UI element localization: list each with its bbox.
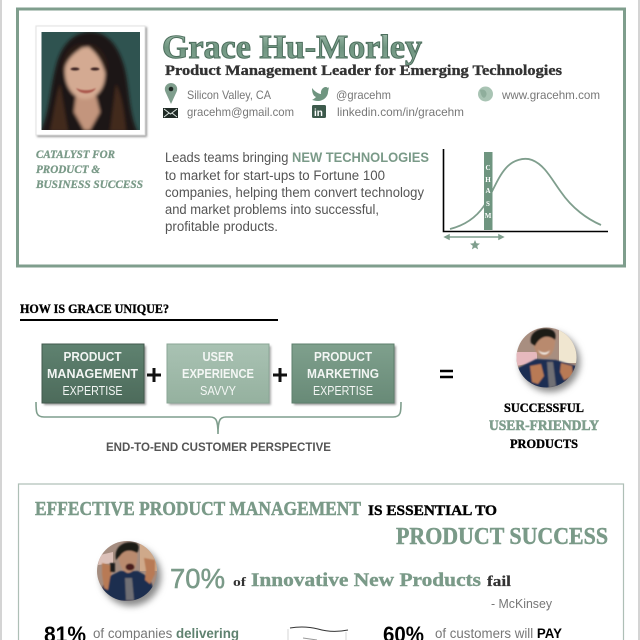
box: product marketing: MARKETING <box>307 367 379 381</box>
twitter handle: @gracehm <box>336 88 391 102</box>
box: product management: MANAGEMENT <box>47 367 138 381</box>
title: name: Grace Hu-Morley <box>162 29 422 66</box>
chasm bar <box>484 152 492 230</box>
chart: chasm adoption curve: H <box>485 176 491 184</box>
tagline: CATALYST FOR <box>36 149 115 161</box>
chart: chasm adoption curve: S <box>486 200 490 208</box>
box: user experience: SAVVY <box>200 384 237 398</box>
intro paragraph <box>165 150 429 234</box>
icon: star <box>470 240 480 249</box>
tagline <box>35 149 143 191</box>
heading: effective product management: EFFECTIVE PRODUCT MANAGEMENT <box>35 498 362 520</box>
box: product marketing: PRODUCT <box>314 350 372 364</box>
icon: sketch graphic <box>288 627 348 640</box>
plus <box>147 368 161 382</box>
stat: 70 percent <box>170 563 511 594</box>
stat: 70 percent: Innovative New Products <box>251 570 481 591</box>
stat: 70 percent: 70% <box>170 563 225 594</box>
icon: linkedin <box>312 105 326 119</box>
plus <box>273 368 287 382</box>
intro paragraph: companies, helping them convert technology <box>165 185 424 200</box>
stat: 81 percent <box>44 622 239 640</box>
box: user experience: USER <box>202 350 234 364</box>
bracket <box>36 402 401 434</box>
icon: linkedin: in <box>314 108 323 119</box>
portrait photo <box>36 26 147 137</box>
location text: Silicon Valley, CA <box>187 88 271 102</box>
website text: www.gracehm.com <box>501 88 600 102</box>
panel: product management stats <box>18 484 624 640</box>
stat: 70 percent: fail <box>487 574 511 590</box>
chart: chasm adoption curve <box>444 149 608 249</box>
heading: effective product management: IS ESSENTIAL TO <box>368 503 497 519</box>
tagline: PRODUCT & <box>36 164 100 176</box>
box: product management: PRODUCT <box>64 350 122 364</box>
box: product marketing <box>292 344 396 405</box>
heading: how is grace unique: HOW IS GRACE UNIQUE? <box>20 302 169 316</box>
icon: location pin <box>165 83 177 104</box>
photo: happy man <box>516 327 580 392</box>
result text <box>489 401 599 451</box>
caption: end-to-end: END-TO-END CUSTOMER PERSPECTIVE <box>106 440 331 454</box>
linkedin text: linkedin.com/in/gracehm <box>337 105 464 119</box>
icon: globe <box>478 86 493 102</box>
tagline: BUSINESS SUCCESS <box>35 179 143 191</box>
panel: profile header <box>18 9 624 266</box>
box: product management <box>42 344 146 405</box>
source: McKinsey: - McKinsey <box>491 597 553 611</box>
stat: 70 percent: of <box>233 574 247 589</box>
intro paragraph: to market for start-ups to Fortune 100 <box>165 168 385 183</box>
result text: USER-FRIENDLY <box>489 418 599 434</box>
email text: gracehm@gmail.com <box>187 105 294 119</box>
intro paragraph: profitable products. <box>165 219 278 234</box>
equals sign <box>440 371 453 377</box>
result text: PRODUCTS <box>510 437 578 451</box>
chart: chasm adoption curve: A <box>485 187 491 195</box>
heading: effective product management: PRODUCT SUCCESS <box>396 524 608 550</box>
chart: chasm adoption curve: M <box>485 212 492 220</box>
box: user experience: EXPERIENCE <box>182 367 254 381</box>
photo: frustrated man <box>97 541 161 606</box>
result text: SUCCESSFUL <box>504 401 584 415</box>
chart: chasm adoption curve: C <box>485 164 491 172</box>
icon: twitter <box>312 87 329 101</box>
intro paragraph: and market problems into successful, <box>165 202 379 217</box>
box: user experience <box>167 344 271 405</box>
heading: effective product management <box>35 498 608 550</box>
box: product management: EXPERTISE <box>62 384 122 398</box>
arrow <box>445 235 503 239</box>
stat: 60 percent <box>383 622 562 640</box>
icon: mail <box>163 108 178 118</box>
intro paragraph: Leads teams bringing NEW TECHNOLOGIES <box>165 150 429 165</box>
box: product marketing: EXPERTISE <box>313 384 373 398</box>
subtitle: Product Management Leader for Emerging Technologies <box>165 63 562 79</box>
